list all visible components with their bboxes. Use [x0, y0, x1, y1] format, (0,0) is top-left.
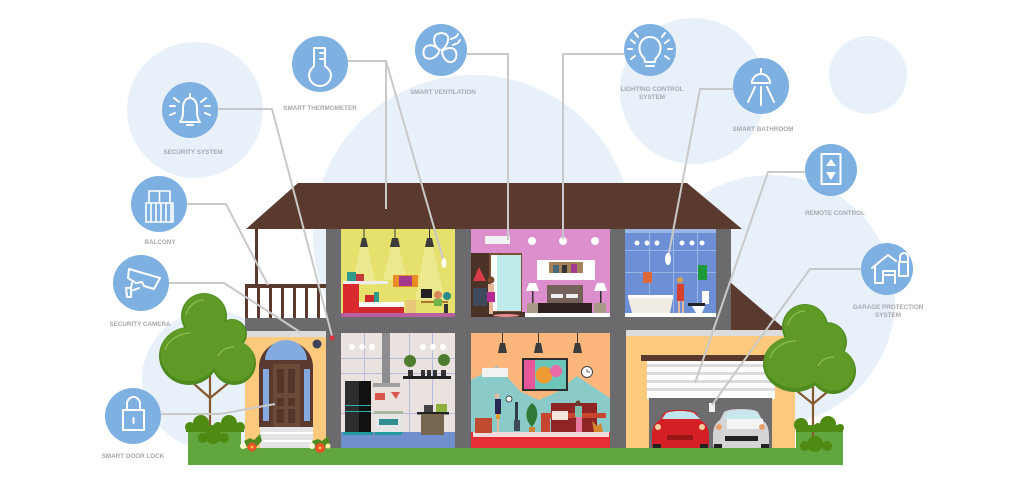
shelf: [537, 260, 595, 280]
label: SYSTEM: [639, 94, 665, 101]
right bushes: [794, 416, 844, 452]
side cabinet: [475, 418, 492, 433]
house: [245, 183, 795, 448]
left tree: [159, 293, 256, 428]
garage sensor: [709, 403, 715, 412]
lamps and nightstands: [526, 283, 607, 313]
steps: [260, 427, 313, 448]
label: GARAGE PROTECTION: [853, 304, 924, 311]
icon: shower: [748, 69, 774, 105]
wall painting: [522, 358, 568, 391]
node: smart bathroom: [733, 58, 793, 133]
silver car: [713, 409, 769, 448]
icon: thermometer: [309, 48, 331, 86]
entry porch: [245, 331, 326, 448]
stove: [374, 411, 403, 435]
node: smart thermometer: [283, 36, 357, 112]
woman: [575, 400, 582, 432]
node: garage protection system: [853, 243, 924, 319]
label: SECURITY SYSTEM: [163, 149, 223, 156]
balcony post and opening: [255, 229, 258, 285]
label: SYSTEM: [875, 312, 901, 319]
ground: [188, 431, 843, 465]
label: BALCONY: [144, 239, 176, 246]
balcony railing: [245, 284, 326, 318]
node: security system: [162, 82, 223, 156]
icon: balcony: [146, 191, 173, 222]
toilet: [692, 291, 709, 313]
icon: light bulb: [628, 33, 672, 66]
roof: [246, 183, 742, 229]
icon: padlock: [123, 397, 144, 430]
label: SMART BATHROOM: [733, 126, 793, 133]
label: LIGHTING CONTROL: [621, 86, 684, 93]
main wall: [326, 229, 731, 448]
fridge: [343, 381, 373, 435]
air conditioner: [485, 236, 510, 244]
icon: bell: [170, 94, 210, 125]
room: master bedroom: [471, 229, 610, 317]
bed: [538, 285, 592, 314]
label: REMOTE CONTROL: [805, 210, 865, 217]
counter: [417, 404, 449, 435]
icon: remote: [822, 154, 840, 184]
icon: camera: [126, 269, 160, 297]
label: [853, 304, 924, 319]
label: [621, 86, 684, 101]
background circles: [127, 18, 907, 450]
label: SECURITY CAMERA: [109, 321, 171, 328]
flowers: [240, 434, 330, 453]
node: balcony: [131, 176, 187, 246]
node: remote control: [805, 144, 865, 217]
node: security camera: [109, 255, 171, 328]
plant shelf: [403, 354, 451, 379]
air conditioner: [482, 368, 508, 377]
room: bathroom: [625, 229, 716, 317]
tv: [515, 402, 518, 420]
security camera device: [312, 340, 322, 348]
icon: house with lock: [872, 253, 908, 283]
woman in wardrobe: [487, 276, 495, 314]
man with ball: [494, 394, 512, 432]
roller door: [647, 361, 775, 399]
garage: [626, 330, 795, 448]
icon: fan: [423, 33, 460, 62]
wall clock: [582, 366, 592, 378]
node: lighting control system: [621, 24, 684, 101]
front door: [259, 340, 313, 427]
potted plant: [526, 403, 537, 432]
wardrobe: [471, 253, 490, 317]
connector lines: [161, 54, 861, 414]
right tree: [763, 304, 856, 438]
balcony slab: [245, 318, 326, 331]
sofa: [541, 403, 606, 432]
small dog: [592, 421, 603, 432]
garage roof: [731, 283, 786, 330]
room: kitchen: [341, 333, 455, 448]
room: kids bedroom: [341, 229, 455, 317]
label: SMART DOOR LOCK: [102, 453, 165, 460]
label: SMART THERMOMETER: [283, 105, 357, 112]
left bushes: [185, 415, 245, 444]
room: living room: [471, 333, 610, 448]
node: smart ventilation: [410, 24, 476, 96]
woman in bathroom: [677, 277, 684, 313]
node: smart door lock: [102, 388, 165, 460]
red car: [652, 410, 709, 448]
label: SMART VENTILATION: [410, 89, 476, 96]
